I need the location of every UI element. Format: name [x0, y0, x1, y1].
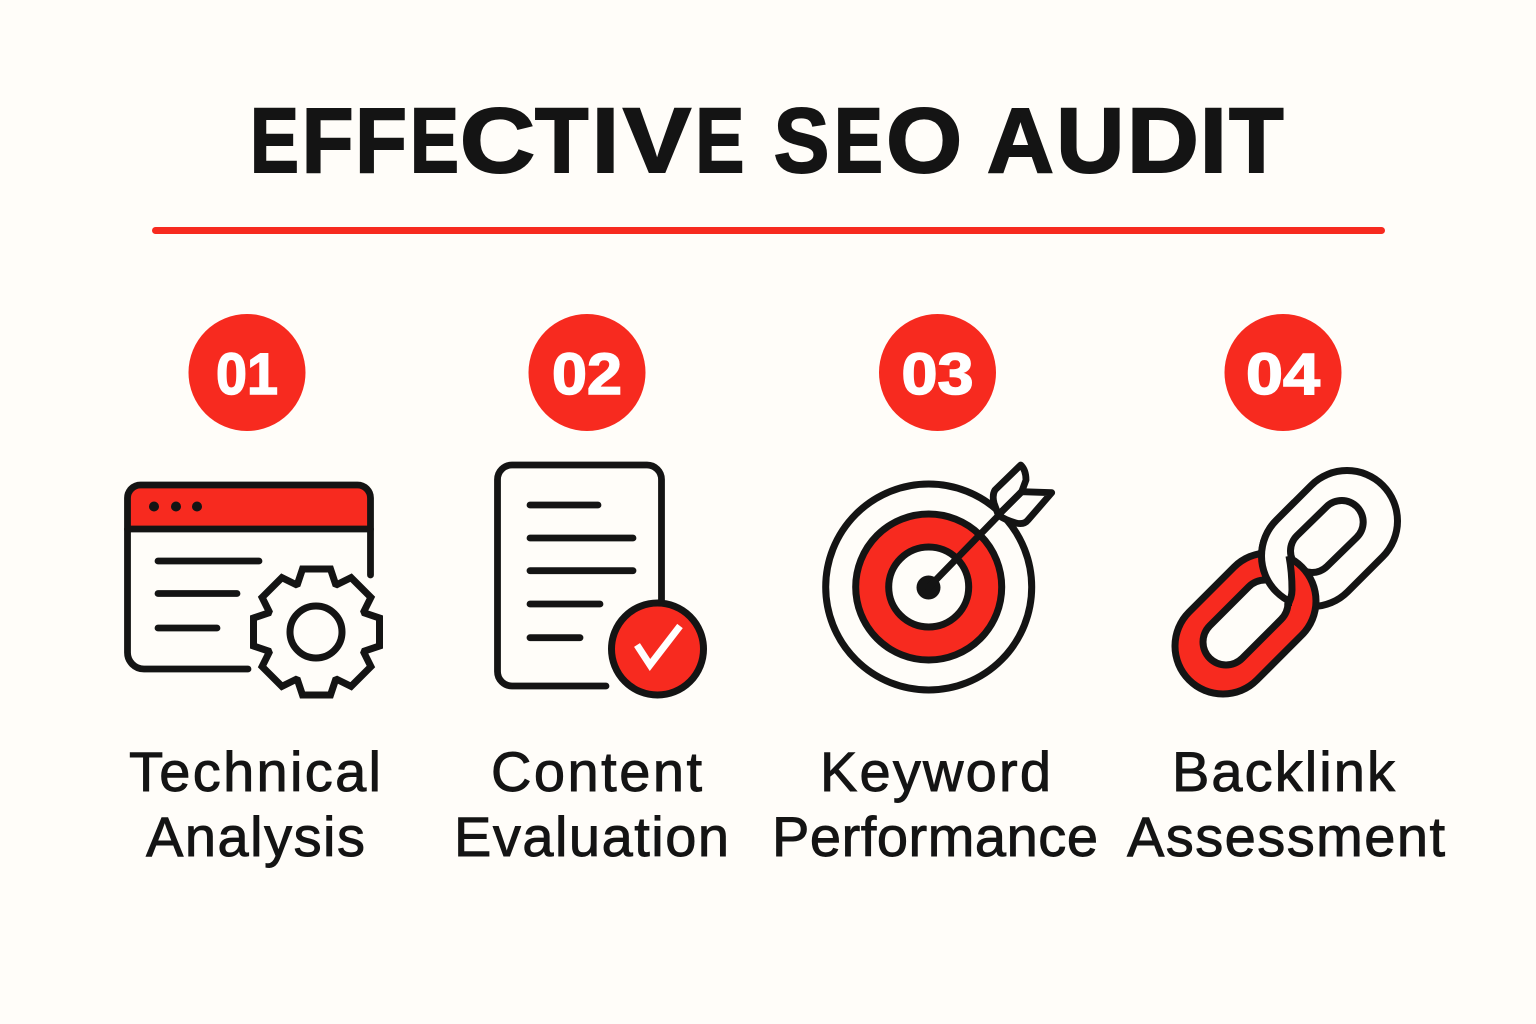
label: technical analysis: Analysis: [146, 805, 365, 868]
label: backlink assessment: Assessment: [1127, 805, 1445, 868]
label: technical analysis: [129, 740, 381, 868]
number badge 03: 03: [902, 342, 974, 407]
title: D: [1127, 90, 1199, 192]
number badge 01: 01: [216, 342, 278, 407]
title: O: [886, 90, 962, 192]
number badge 02: [528, 314, 646, 431]
icon: target with arrow: [826, 465, 1052, 690]
title: I: [592, 90, 619, 192]
number badge 03: [879, 314, 996, 431]
panel: content evaluation: [454, 314, 729, 868]
panel: backlink assessment: [1127, 314, 1445, 868]
label: keyword performance: [772, 740, 1098, 868]
title: T: [535, 90, 588, 192]
label: backlink assessment: Backlink: [1172, 740, 1396, 803]
label: content evaluation: [454, 740, 729, 868]
label: keyword performance: Performance: [772, 805, 1098, 868]
panel: technical analysis: [128, 314, 381, 868]
title: A: [987, 90, 1054, 192]
title: E: [695, 90, 744, 192]
title: E: [250, 90, 299, 192]
title: F: [355, 90, 407, 192]
label: technical analysis: Technical: [129, 740, 381, 803]
title: V: [623, 90, 691, 192]
title: I: [1200, 90, 1227, 192]
title: T: [1229, 90, 1284, 192]
label: keyword performance: Keyword: [820, 740, 1051, 803]
title: U: [1056, 90, 1124, 192]
number badge 02: 02: [552, 342, 622, 407]
red title divider: [152, 227, 1385, 234]
title: E: [410, 90, 459, 192]
title: F: [302, 90, 354, 192]
label: content evaluation: Evaluation: [454, 805, 729, 868]
title: S: [774, 90, 829, 192]
label: backlink assessment: [1127, 740, 1445, 868]
icon: chain link: [1223, 521, 1347, 646]
icon: browser window with gear: [128, 485, 380, 695]
panel: keyword performance: [772, 314, 1098, 868]
title: C: [460, 90, 535, 192]
label: content evaluation: Content: [491, 740, 702, 803]
number badge 04: 04: [1246, 342, 1320, 407]
number badge 04: [1224, 314, 1342, 431]
number badge 01: [188, 314, 306, 431]
icon: document with check mark: [498, 465, 704, 695]
title: E: [834, 90, 883, 192]
